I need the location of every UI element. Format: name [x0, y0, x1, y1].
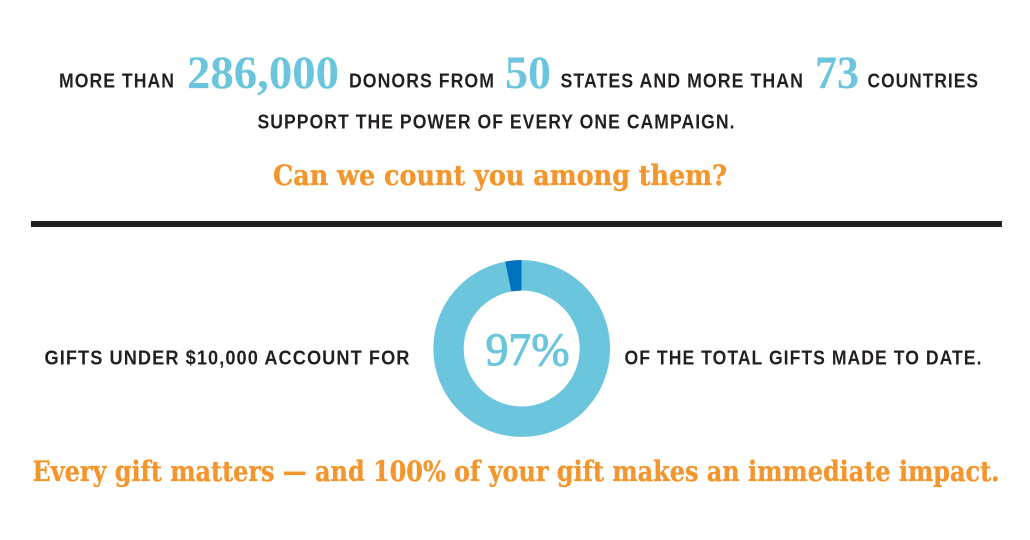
text: campaign line: SUPPORT THE POWER OF EVERY ONE CAMPAIGN.: [258, 111, 736, 134]
number: 73: 73: [815, 48, 859, 99]
number: 50: 50: [505, 48, 551, 99]
text: donors from: DONORS FROM: [349, 70, 495, 93]
headline: donor statistics: [59, 48, 979, 99]
donut ring: 97% share: [448, 275, 595, 422]
thick divider: [31, 221, 1002, 227]
text: of the total: OF THE TOTAL GIFTS MADE TO DATE.: [624, 347, 982, 370]
text: more than: MORE THAN: [59, 70, 175, 93]
donut value: 97%: [486, 325, 570, 376]
text: countries: COUNTRIES: [868, 70, 979, 93]
donut segment: remaining 3%: [505, 260, 522, 291]
text: states and more than: STATES AND MORE THAN: [560, 70, 804, 93]
number: 286,000: 286,000: [187, 48, 339, 99]
donut chart: 97%: [448, 260, 595, 422]
orange question heading: Can we count you among them?: [273, 159, 727, 192]
text: gifts under: GIFTS UNDER $10,000 ACCOUNT FOR: [44, 347, 410, 370]
